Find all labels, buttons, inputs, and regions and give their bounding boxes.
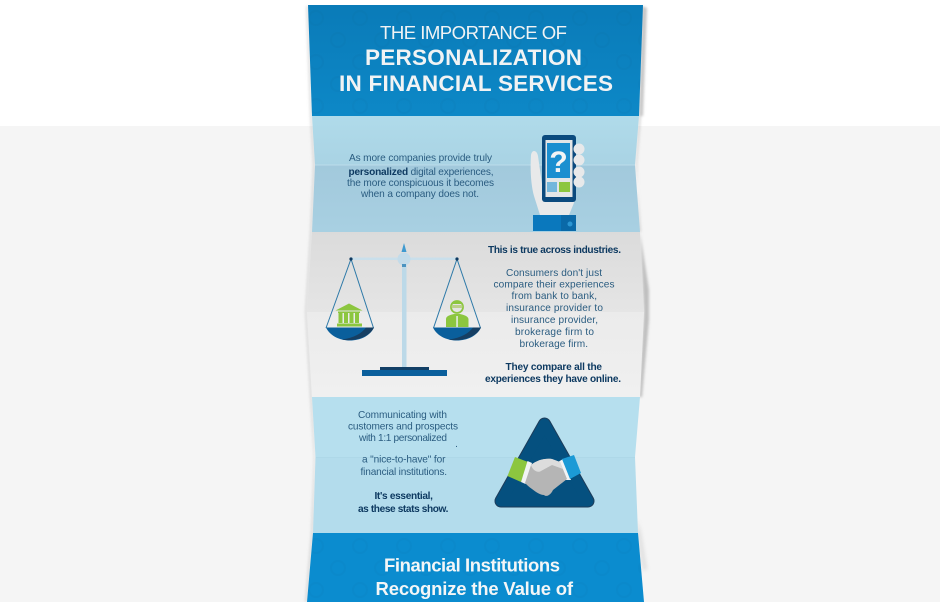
industries text: insurance provider to [506,303,603,314]
intro text: As more companies provide truly [349,153,493,164]
industries text: from bank to bank, [512,291,597,302]
intro text: personalized digital experiences, [348,167,494,178]
communicating text: . [455,439,458,450]
icon: hand holding phone: ? [549,146,568,179]
communicating text: as these stats show. [358,504,449,515]
section heading: Recognize the Value of [376,578,574,599]
intro text: when a company does not. [360,189,479,200]
industries text: Consumers don't just [506,268,602,279]
panel: financial institutions heading [307,533,644,602]
industries text: brokerage firm to [515,327,594,338]
intro text: the more conspicuous it becomes [347,178,494,189]
title: IN FINANCIAL SERVICES [339,71,613,96]
paper shadow [305,6,649,602]
panel: personalized experiences [312,116,640,232]
industries text: They compare all the [506,362,602,373]
icon: bank [336,304,362,326]
panel: communicating [312,397,640,533]
communicating text: with 1:1 personalized [358,433,447,444]
communicating text: customers and prospects [348,422,458,432]
title [339,22,613,96]
industries text: insurance provider, [511,315,598,326]
icon: person [446,301,468,327]
section heading: Financial Institutions [384,554,560,576]
panel: header [308,5,643,116]
icon: balance scale [326,243,481,376]
communicating text: a "nice-to-have" for [362,454,446,466]
icon: hand holding phone [531,135,584,231]
lower right shadow [637,520,646,570]
industries text: compare their experiences [494,280,614,290]
communicating text [348,410,458,515]
title: THE IMPORTANCE OF [380,22,567,43]
industries text [485,245,621,385]
icon: handshake in triangle [501,424,588,501]
title: PERSONALIZATION [365,45,582,70]
panel: true across industries [307,232,644,397]
intro text [347,153,494,200]
communicating text: financial institutions. [361,467,447,478]
communicating text: It's essential, [374,491,433,502]
section heading [376,554,574,599]
communicating text: Communicating with [358,410,447,421]
industries text: brokerage firm. [520,339,588,350]
industries text: This is true across industries. [488,245,621,256]
industries text: experiences they have online. [485,374,621,385]
